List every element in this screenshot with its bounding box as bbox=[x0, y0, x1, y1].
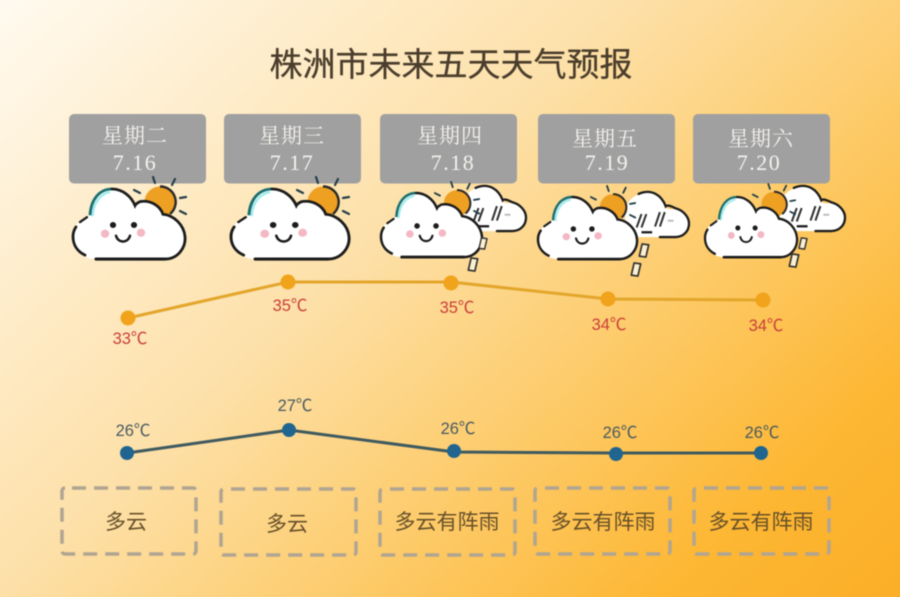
title: 株洲市未来五天天气预报 bbox=[270, 38, 632, 86]
chart: high temperature line: 34℃ bbox=[592, 316, 626, 334]
chart: high temperature line bbox=[113, 274, 783, 348]
panel: Thursday date: 7.18 bbox=[431, 150, 475, 175]
chart: high temperature line: 35℃ bbox=[273, 297, 307, 315]
chart: high temperature line: 34℃ bbox=[749, 317, 783, 335]
label: weather Tuesday bbox=[62, 488, 196, 554]
panel: Friday date: 7.19 bbox=[585, 150, 629, 175]
panel: Friday date bbox=[538, 114, 675, 184]
chart: low temperature line: 26℃ bbox=[745, 424, 779, 442]
panel: Thursday date bbox=[380, 114, 517, 184]
label: weather Thursday: 多云有阵雨 bbox=[394, 511, 500, 534]
chart: low temperature line: 26℃ bbox=[603, 424, 637, 442]
label: weather Thursday bbox=[380, 489, 515, 555]
panel: Saturday date bbox=[693, 114, 830, 184]
panel: Wednesday date bbox=[224, 114, 361, 184]
icon: partly cloudy Tuesday bbox=[73, 177, 186, 259]
label: weather Saturday: 多云有阵雨 bbox=[708, 511, 814, 534]
label: weather Saturday bbox=[694, 488, 829, 554]
forecast content bbox=[62, 38, 845, 555]
label: weather Friday bbox=[535, 488, 670, 554]
chart: high temperature line: 33℃ bbox=[113, 330, 147, 348]
panel: Wednesday date: 7.17 bbox=[270, 150, 314, 175]
chart: low temperature line bbox=[116, 397, 779, 461]
panel: Tuesday date: 7.16 bbox=[113, 150, 157, 175]
panel: Saturday date: 星期六 bbox=[728, 127, 794, 151]
panel: Wednesday date: 星期三 bbox=[259, 124, 325, 148]
panel: Tuesday date bbox=[69, 114, 206, 184]
panel: Saturday date: 7.20 bbox=[737, 150, 781, 175]
panel: Tuesday date: 星期二 bbox=[102, 124, 168, 148]
icon: partly cloudy Wednesday bbox=[231, 177, 349, 259]
panel: Friday date: 星期五 bbox=[572, 127, 638, 151]
icon: showers Friday bbox=[538, 186, 689, 276]
icon: showers Saturday bbox=[705, 184, 845, 267]
label: weather Friday: 多云有阵雨 bbox=[550, 511, 656, 534]
label: weather Wednesday bbox=[221, 489, 356, 555]
chart: low temperature line: 26℃ bbox=[116, 422, 150, 440]
label: weather Wednesday: 多云 bbox=[266, 513, 308, 536]
icon: showers Thursday bbox=[381, 182, 526, 271]
panel: Thursday date: 星期四 bbox=[417, 124, 483, 148]
chart: high temperature line: 35℃ bbox=[440, 299, 474, 317]
chart: low temperature line: 26℃ bbox=[441, 420, 475, 438]
label: weather Tuesday: 多云 bbox=[105, 511, 147, 534]
chart: low temperature line: 27℃ bbox=[278, 397, 312, 415]
